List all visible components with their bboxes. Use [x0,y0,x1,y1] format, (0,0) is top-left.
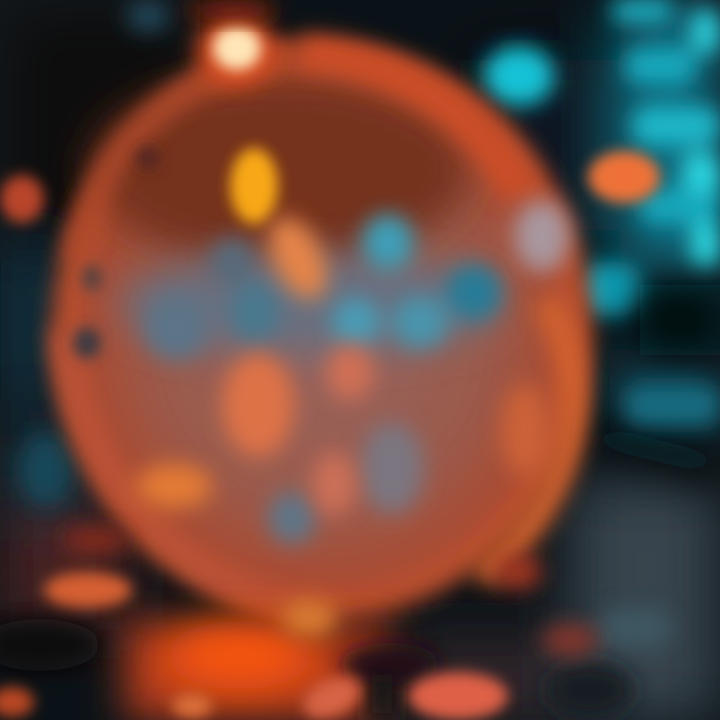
teal light stripes, top right [578,0,720,316]
orange bokeh, right [588,151,660,203]
glass sphere [52,44,592,620]
orange bokeh, bottom corner [0,687,34,717]
coral bokeh, bottom [172,669,508,720]
red bokeh, lower left [62,526,130,554]
teal bokeh, lower right [600,385,720,646]
sphere base glow [125,600,390,720]
orange bokeh, left [0,175,44,223]
bright light at top of sphere [196,14,276,86]
lower left rim glow [62,330,320,618]
blue bokeh inside sphere [144,214,502,544]
dark spots on left rim [73,146,160,359]
dark shapes, bottom centre [340,643,634,720]
red glow above the light [186,0,278,20]
dark teal bokeh, top left [126,0,170,32]
upper darker interior [90,75,470,265]
yellow-orange reflection [230,148,278,224]
sphere body [52,44,592,620]
orange bokeh, bottom left [44,572,132,608]
teal bokeh, top [483,46,555,106]
right rim glow [480,300,574,578]
bottom left dark patch [0,619,100,671]
pale bokeh at sphere edge [514,200,570,272]
dark band, right [588,285,720,480]
upper right rim glow [300,52,520,195]
upper left rim glow [75,52,300,260]
red bokeh, bottom right of sphere [494,554,598,656]
grey-blue middle band [120,257,500,353]
orange streak [258,208,338,308]
orange reflections, lower interior [136,344,549,516]
teal bokeh, left [20,434,72,506]
